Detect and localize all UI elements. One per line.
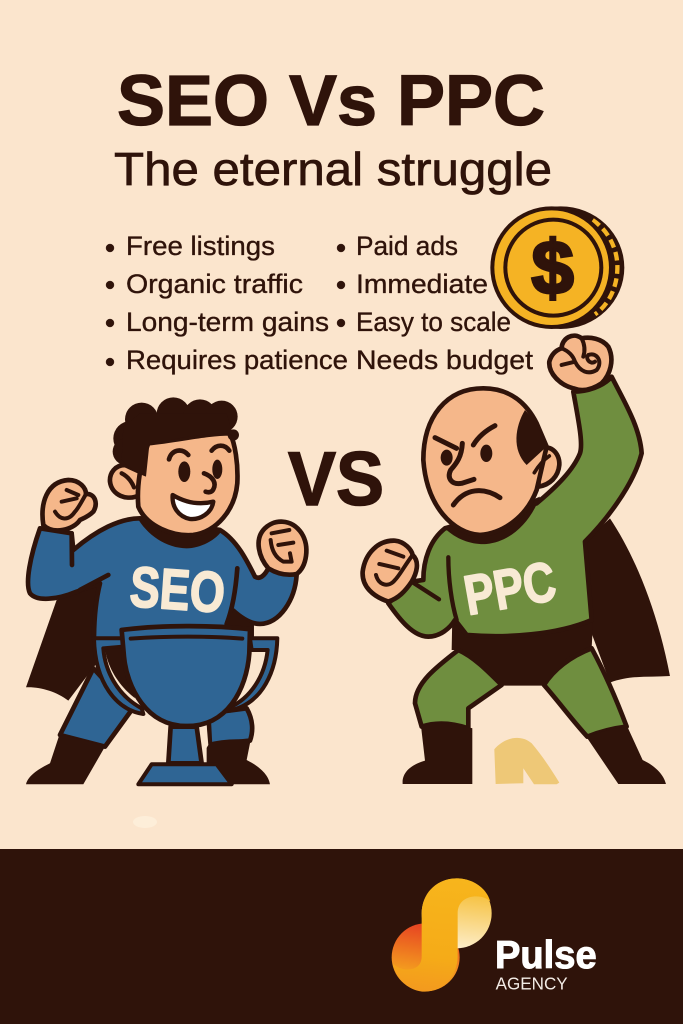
logo wordmark: Pulse [495, 934, 597, 977]
hair patch [516, 410, 547, 465]
right leg [544, 648, 627, 737]
PPC villain character [363, 336, 670, 784]
left boot [26, 735, 105, 784]
head [138, 433, 237, 535]
PPC bullet list: Immediate [356, 269, 488, 299]
SEO bullet list: Organic traffic [126, 269, 303, 299]
sweater [388, 377, 642, 637]
shorts [452, 617, 593, 686]
trophy base [138, 764, 232, 784]
right boot [207, 739, 270, 784]
faint yellow shape [494, 738, 559, 784]
title: SEO Vs PPC [117, 62, 545, 141]
faint pale mark below hero [133, 816, 157, 828]
PPC bullet list [337, 231, 534, 375]
SEO bullet list: Requires patience [126, 345, 348, 375]
left leg [415, 650, 502, 728]
PPC bullet list: Needs budget [356, 345, 534, 375]
Pulse Agency logo [392, 878, 597, 993]
neck collar [137, 517, 223, 548]
ear [110, 465, 143, 498]
ear [538, 448, 559, 487]
PPC chest lettering: PPC [459, 549, 560, 627]
sweater [28, 518, 297, 640]
left fist [43, 480, 96, 530]
logo tagline: AGENCY [496, 973, 568, 993]
trophy handles [94, 638, 143, 714]
SEO bullet list: Long-term gains [126, 307, 329, 337]
head [423, 388, 547, 535]
trophy cup [122, 626, 250, 726]
PPC bullet list: Paid ads [356, 231, 458, 261]
icon: gold dollar coin: $ [532, 226, 574, 311]
angry face [441, 450, 453, 466]
icon: gold dollar coin [490, 206, 624, 329]
trophy stem [168, 727, 202, 763]
left boot [403, 723, 472, 784]
lowered fist [363, 541, 417, 602]
right boot [587, 727, 666, 784]
right fist [259, 522, 306, 575]
SEO chest lettering: SEO [128, 555, 227, 626]
footer band [0, 849, 683, 1024]
raised fist [549, 336, 611, 390]
cape [26, 580, 103, 701]
hair [113, 397, 239, 477]
left leg [60, 668, 132, 747]
SEO bullet list [106, 231, 348, 375]
cape [585, 518, 670, 683]
face details [178, 461, 190, 482]
PPC bullet list: Easy to scale [356, 307, 511, 337]
subtitle: The eternal struggle [114, 143, 552, 195]
logo mark [392, 878, 492, 992]
right leg [208, 708, 252, 745]
SEO hero character [26, 397, 306, 784]
VS label: VS [288, 437, 384, 522]
neck collar [445, 497, 540, 544]
SEO bullet list: Free listings [126, 231, 275, 261]
